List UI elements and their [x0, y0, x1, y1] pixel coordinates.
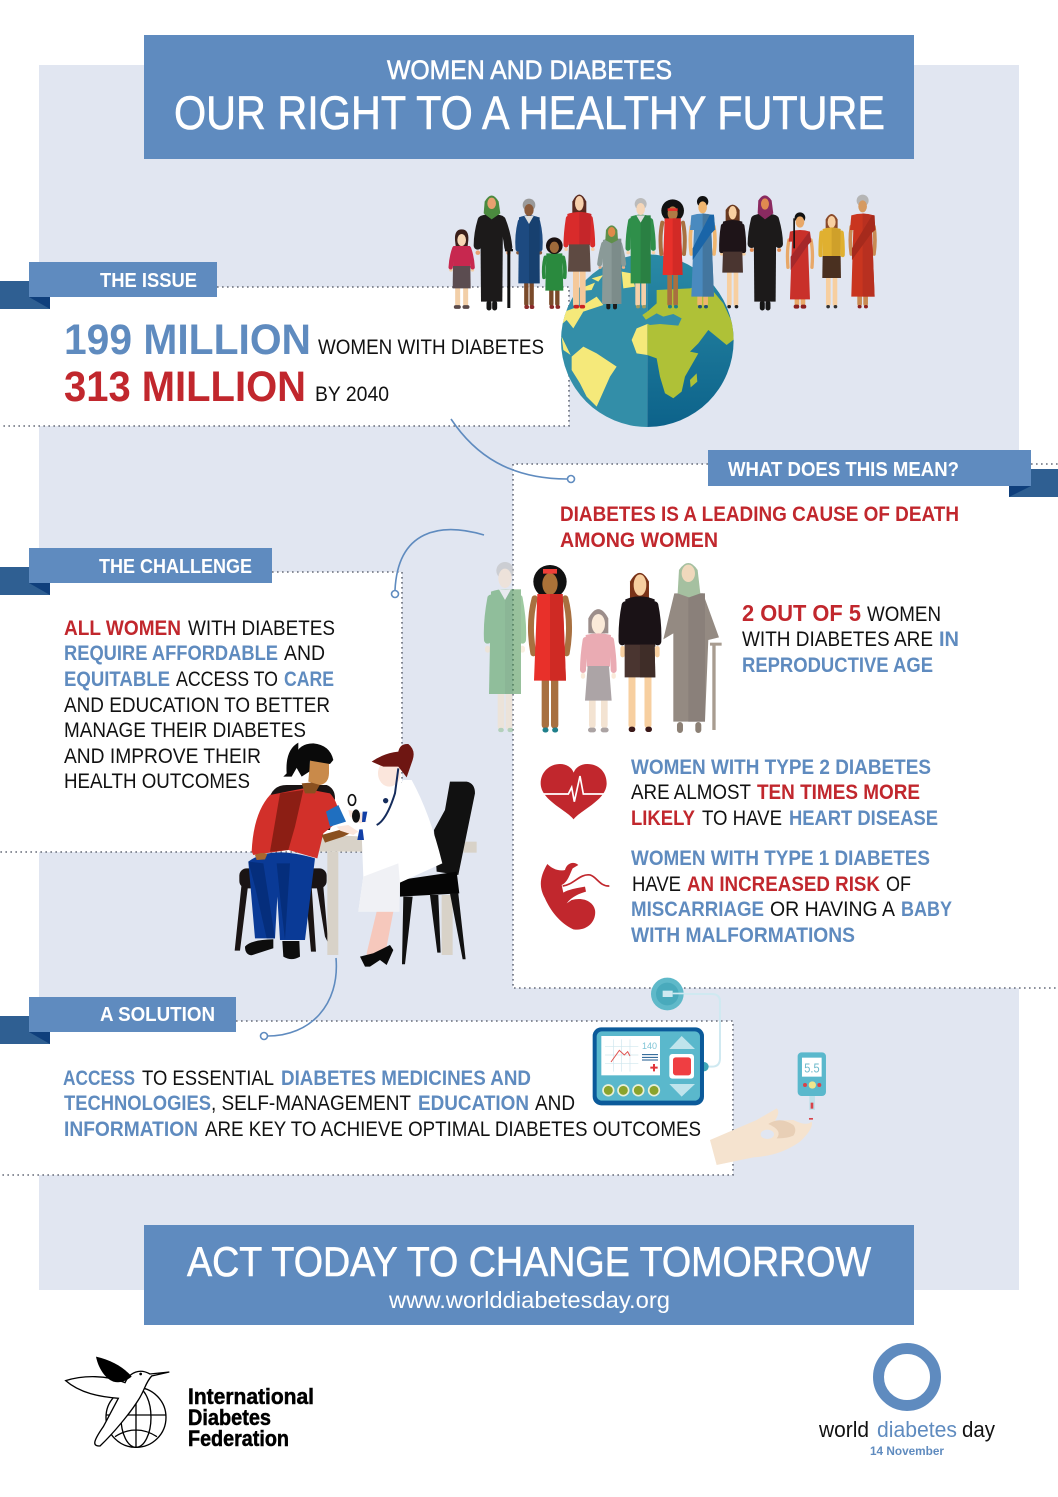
- type 1 text: AN INCREASED RISK: [687, 873, 880, 896]
- challenge text: EQUITABLE: [64, 668, 170, 691]
- woman 6 grey hijab: [600, 225, 624, 307]
- challenge text: ALL WOMEN: [64, 617, 181, 640]
- panel: the challenge: [0, 548, 402, 852]
- logo: world diabetes day: [818, 1348, 995, 1458]
- woman 1 girl: [451, 229, 473, 307]
- type 2 text: WOMEN WITH TYPE 2 DIABETES: [631, 756, 931, 779]
- leading cause heading: AMONG WOMEN: [560, 529, 718, 552]
- type 1 text: WOMEN WITH TYPE 1 DIABETES: [631, 847, 930, 870]
- panel: what does this mean: WHAT DOES THIS MEAN?: [728, 459, 959, 481]
- challenge text: REQUIRE AFFORDABLE: [64, 642, 278, 665]
- icon: hummingbird and globe: [66, 1357, 169, 1447]
- table: [298, 834, 477, 955]
- challenge text: MANAGE THEIR DIABETES: [64, 719, 306, 742]
- logo: world diabetes day: diabetes: [877, 1417, 957, 1442]
- woman: red dress: [531, 565, 569, 730]
- reproductive age text: WOMEN: [867, 603, 941, 626]
- bottom call to action banner: www.worlddiabetesday.org: [388, 1287, 670, 1313]
- connector: issue to meaning: [451, 419, 574, 482]
- organisation name: International: [188, 1384, 314, 1409]
- organisation name: Federation: [188, 1426, 289, 1451]
- statistic: 313 million: 313 MILLION: [64, 363, 306, 411]
- woman: hijab with cane: [663, 563, 722, 730]
- woman 11 purple hijab: [752, 195, 779, 308]
- solution text: DIABETES MEDICINES AND: [281, 1067, 531, 1090]
- challenge text: AND IMPROVE THEIR: [64, 745, 261, 768]
- woman 4 girl green: [544, 237, 565, 307]
- solution text: TO ESSENTIAL: [142, 1067, 274, 1090]
- reproductive age text: 2 OUT OF 5: [742, 600, 861, 626]
- type 1 text: [631, 847, 952, 947]
- challenge text: [64, 617, 335, 793]
- reproductive age text: IN: [939, 628, 959, 651]
- challenge text: WITH DIABETES: [188, 617, 335, 640]
- title banner: WOMEN AND DIABETES: [387, 55, 672, 85]
- logo: world diabetes day: day: [962, 1417, 995, 1442]
- statistic: 313 million: BY 2040: [315, 383, 389, 406]
- challenge text: CARE: [284, 668, 334, 691]
- statistic: 199 million: WOMEN WITH DIABETES: [318, 336, 544, 359]
- woman: girl pink: [583, 609, 614, 730]
- woman 14 red sari elder: [850, 195, 875, 307]
- icon: heart: [540, 764, 607, 819]
- organisation name: Diabetes: [188, 1405, 271, 1430]
- woman: elder green dress: [487, 562, 523, 730]
- statistic: 199 million: [64, 316, 544, 364]
- connector: meaning to challenge: [392, 530, 484, 598]
- type 1 text: MISCARRIAGE: [631, 898, 764, 921]
- type 1 text: OF: [886, 873, 911, 896]
- type 2 text: TEN TIMES MORE: [757, 781, 920, 804]
- woman 3 blue dress: [518, 199, 540, 307]
- panel: what does this mean: [513, 450, 1058, 988]
- woman 7 green coat: [628, 198, 654, 307]
- background panel: [39, 65, 1019, 1290]
- bottom call to action banner: ACT TODAY TO CHANGE TOMORROW: [187, 1238, 871, 1285]
- title banner: [144, 35, 914, 159]
- illustration: crowd of women: [451, 194, 875, 308]
- woman 2 black robe: [478, 195, 513, 308]
- challenge text: AND: [284, 642, 325, 665]
- woman 10 black jacket: [722, 205, 744, 307]
- solution text: EDUCATION: [418, 1092, 529, 1115]
- woman 9 blue sari: [690, 196, 715, 307]
- type 1 text: BABY: [901, 898, 952, 921]
- illustration: glucose monitor device: 140: [642, 1041, 657, 1051]
- woman 12 red sari: [787, 212, 812, 307]
- logo: International Diabetes Federation: [66, 1357, 314, 1451]
- reproductive age text: WITH DIABETES ARE: [742, 628, 933, 651]
- leading cause heading: [560, 503, 959, 552]
- doctor: [337, 744, 442, 967]
- organisation name: [188, 1384, 314, 1451]
- panel: the challenge: THE CHALLENGE: [99, 556, 252, 578]
- leading cause heading: DIABETES IS A LEADING CAUSE OF DEATH: [560, 503, 959, 526]
- challenge text: HEALTH OUTCOMES: [64, 770, 250, 793]
- logo: world diabetes day: world: [818, 1417, 869, 1442]
- solution text: [63, 1067, 701, 1141]
- doctor chair: [400, 782, 475, 964]
- bottom call to action banner: [144, 1225, 914, 1325]
- type 2 text: ARE ALMOST: [631, 781, 751, 804]
- solution text: AND: [535, 1092, 575, 1115]
- panel: a solution: A SOLUTION: [100, 1004, 215, 1026]
- woman 13 yellow top: [821, 214, 843, 307]
- woman 8 red dress: [661, 199, 685, 307]
- solution text: , SELF-MANAGEMENT: [211, 1092, 411, 1115]
- solution text: ARE KEY TO ACHIEVE OPTIMAL DIABETES OUTCOMES: [205, 1118, 701, 1141]
- type 2 text: [631, 756, 938, 830]
- illustration: hand with glucose meter: [710, 1052, 826, 1165]
- panel: the issue: [0, 262, 569, 426]
- statistic: 199 million: 199 MILLION: [64, 316, 311, 364]
- patient chair: [235, 785, 335, 952]
- illustration: globe: [560, 253, 735, 430]
- solution text: ACCESS: [63, 1067, 135, 1090]
- reproductive age text: [742, 600, 959, 677]
- type 2 text: LIKELY: [631, 807, 695, 830]
- illustration: five women of different ages: [487, 562, 722, 730]
- type 2 text: TO HAVE: [702, 807, 782, 830]
- title banner: OUR RIGHT TO A HEALTHY FUTURE: [174, 86, 885, 139]
- illustration: hand with glucose meter: 5.5: [804, 1060, 820, 1075]
- type 1 text: HAVE: [632, 873, 681, 896]
- connector: challenge to solution: [260, 958, 336, 1040]
- woman 5 red top: [566, 194, 593, 307]
- illustration: patient and doctor: [235, 743, 477, 967]
- reproductive age text: REPRODUCTIVE AGE: [742, 654, 933, 677]
- panel: a solution: [0, 997, 733, 1175]
- patient: [245, 743, 353, 959]
- type 1 text: WITH MALFORMATIONS: [631, 924, 855, 947]
- logo: world diabetes day: 14 November: [870, 1444, 944, 1458]
- solution text: INFORMATION: [64, 1118, 198, 1141]
- illustration: glucose monitor device: [593, 978, 720, 1105]
- type 2 text: HEART DISEASE: [789, 807, 938, 830]
- type 1 text: OR HAVING A: [770, 898, 895, 921]
- woman: black jacket: [622, 573, 658, 729]
- icon: embryo: [541, 863, 609, 930]
- solution text: TECHNOLOGIES: [64, 1092, 211, 1115]
- challenge text: AND EDUCATION TO BETTER: [64, 694, 330, 717]
- panel: the issue: THE ISSUE: [100, 270, 197, 292]
- challenge text: ACCESS TO: [176, 668, 278, 691]
